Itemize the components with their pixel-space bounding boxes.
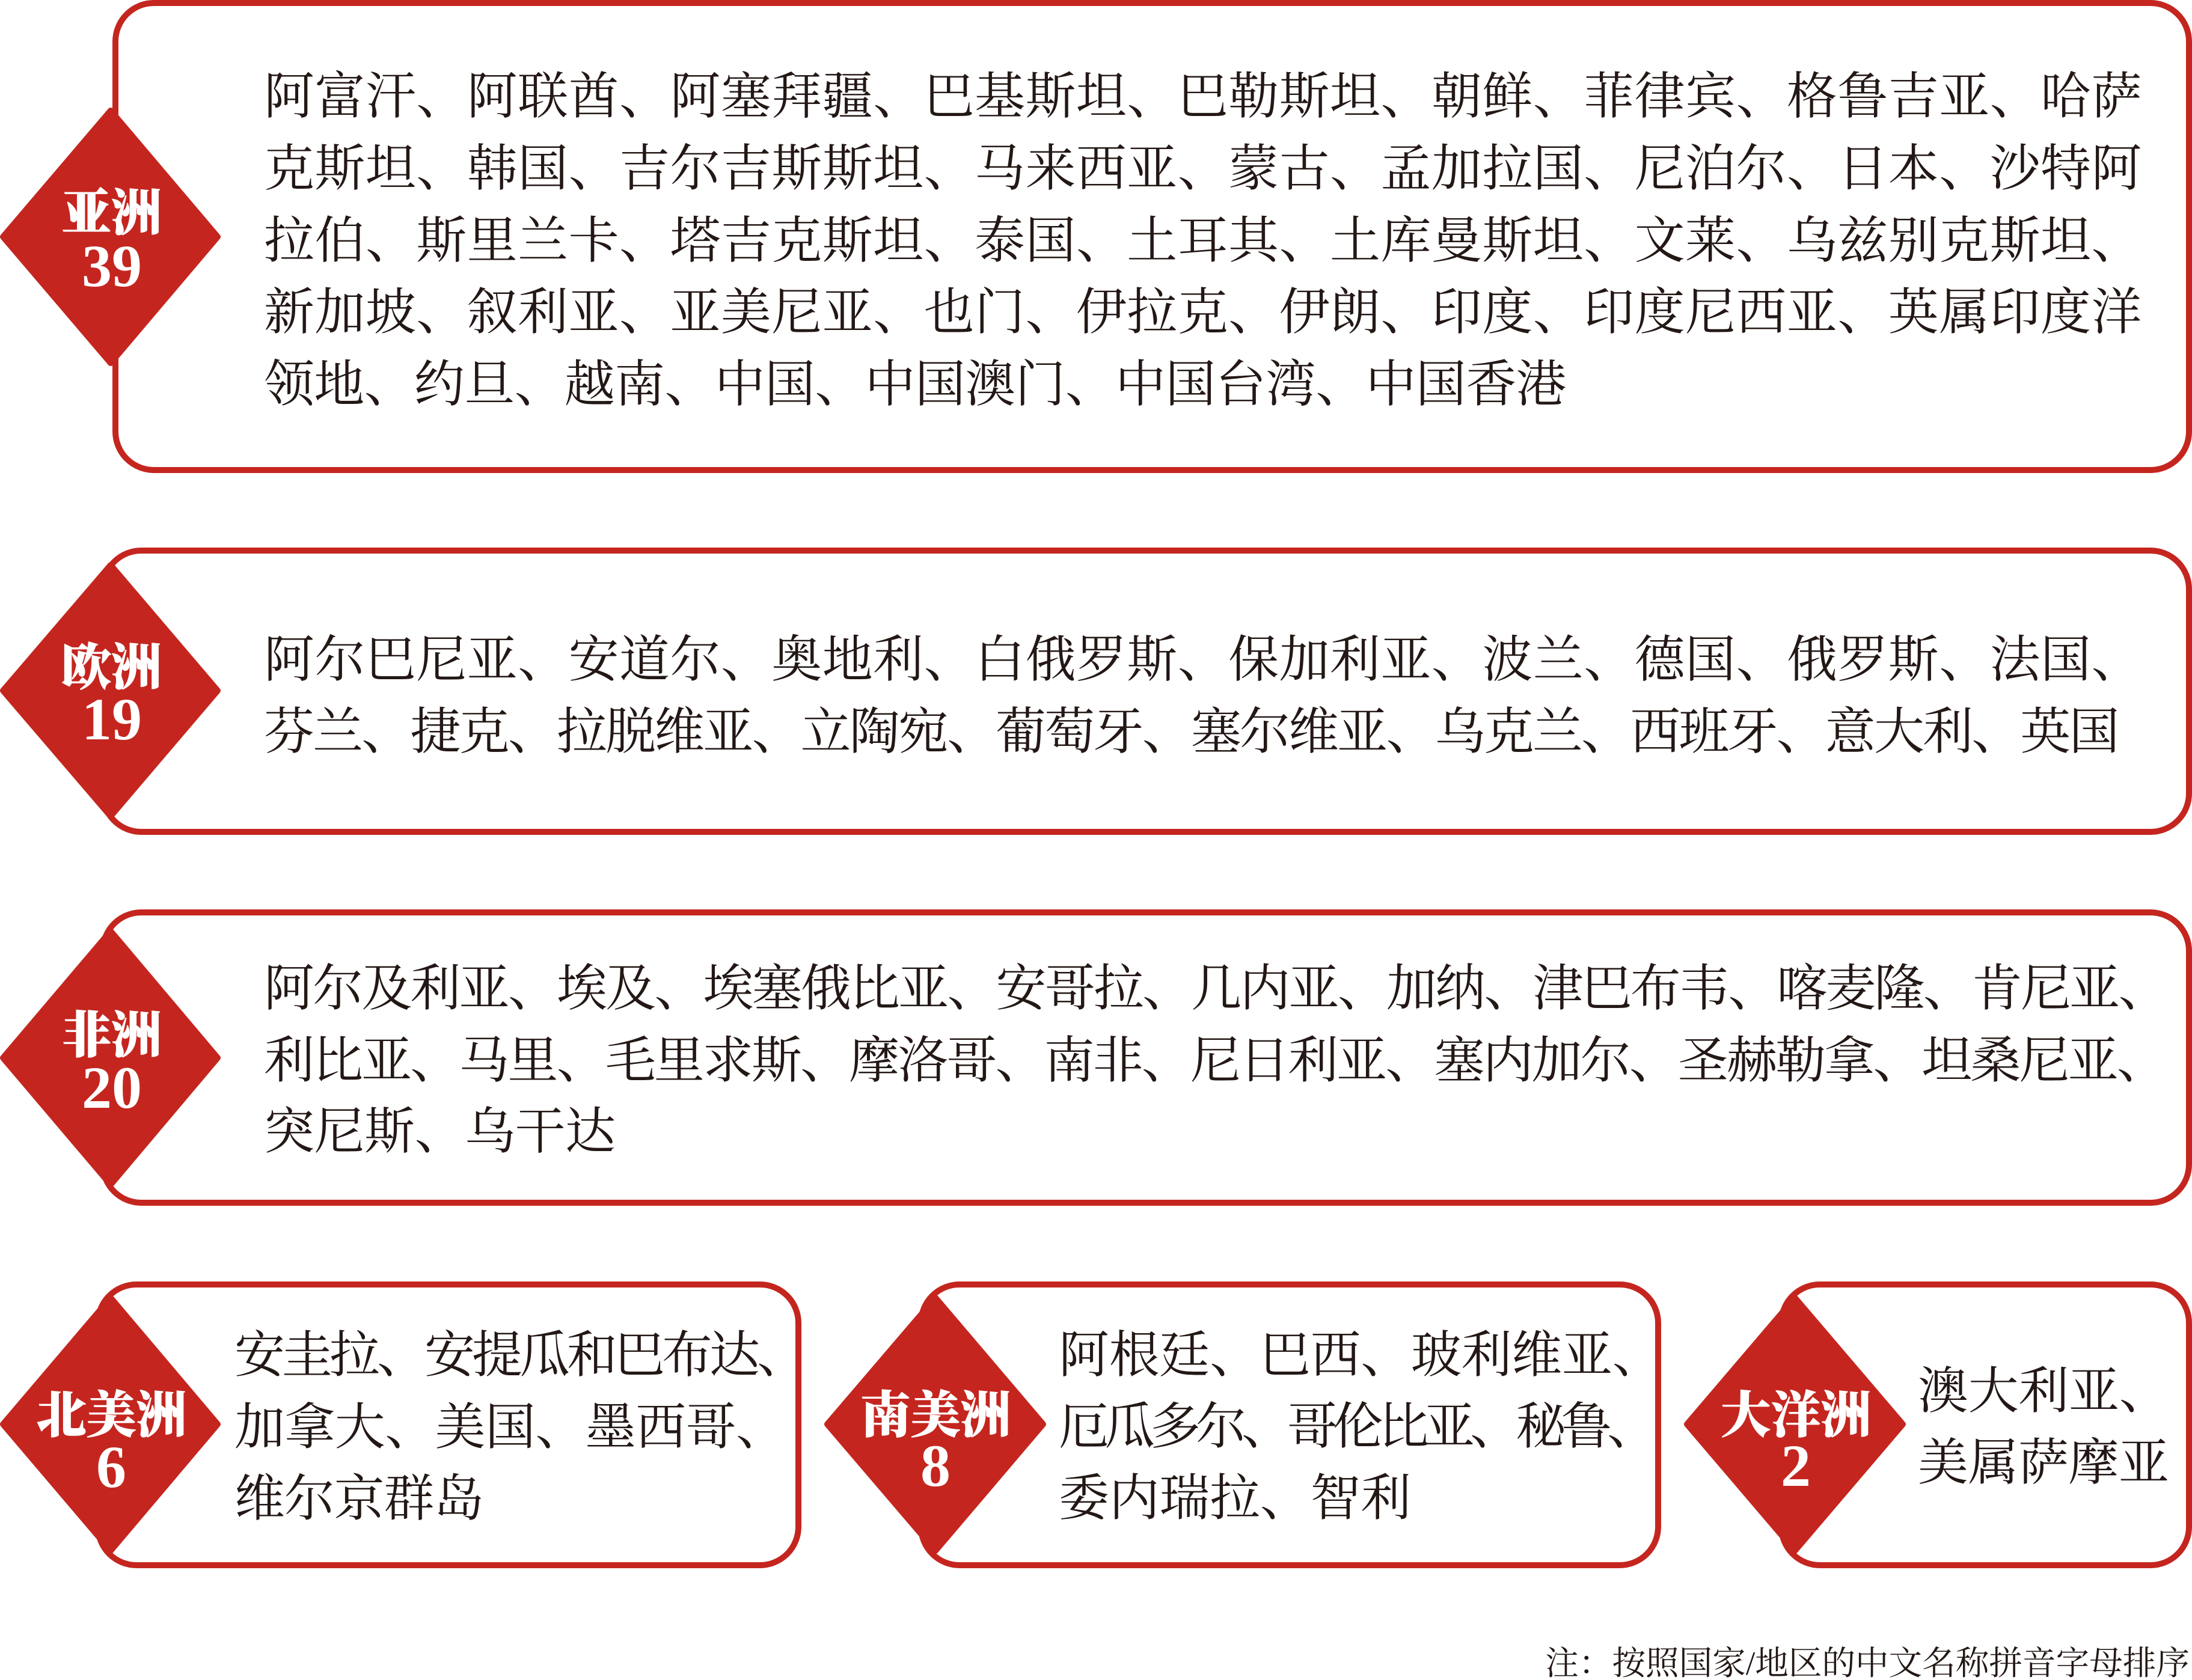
- text block: Africa countries: [264, 961, 2167, 1160]
- text block: Oceania countries: [1918, 1364, 2170, 1491]
- panel: Asia: [3, 3, 2189, 470]
- text block: Asia countries: 拉伯、斯里兰卡、塔吉克斯坦、泰国、土耳其、土库曼斯坦、文莱、乌兹别克斯坦、: [264, 213, 2142, 269]
- text block: Asia countries: 新加坡、叙利亚、亚美尼亚、也门、伊拉克、伊朗、印度、印度尼西亚、英属印度洋: [264, 285, 2142, 341]
- text block: South America countries: 厄瓜多尔、哥伦比亚、秘鲁、: [1059, 1399, 1653, 1455]
- text block: Africa countries: 阿尔及利亚、埃及、埃塞俄比亚、安哥拉、几内亚、加纳、津巴布韦、喀麦隆、肯尼亚、: [264, 961, 2167, 1017]
- text block: Asia countries: 领地、约旦、越南、中国、中国澳门、中国台湾、中国香港: [264, 357, 1566, 413]
- label: South America 8: 南美洲: [861, 1388, 1010, 1443]
- text block: North America countries: 安圭拉、安提瓜和巴布达、: [234, 1328, 804, 1384]
- label: Oceania 2: 2: [1781, 1432, 1811, 1499]
- label: North America 6: [36, 1388, 186, 1500]
- text block: South America countries: [1059, 1328, 1662, 1527]
- text block: North America countries: [234, 1328, 804, 1527]
- text block: South America countries: 委内瑞拉、智利: [1059, 1471, 1411, 1527]
- label: Africa 20: 非洲: [61, 1008, 161, 1063]
- label: Asia 39: 亚洲: [61, 186, 161, 241]
- text block: Asia countries: 克斯坦、韩国、吉尔吉斯斯坦、马来西亚、蒙古、孟加拉国、尼泊尔、日本、沙特阿: [264, 141, 2142, 197]
- text block: Oceania countries: 澳大利亚、: [1918, 1364, 2170, 1420]
- text block: Asia countries: [264, 69, 2142, 413]
- icon: Oceania diamond badge: [1687, 1298, 1903, 1551]
- label: South America 8: [861, 1388, 1010, 1499]
- text block: North America countries: 加拿大、美国、墨西哥、: [234, 1400, 786, 1456]
- panel: Oceania: [1687, 1284, 2189, 1565]
- label: Asia 39: 39: [82, 233, 142, 299]
- label: Oceania 2: 大洋洲: [1721, 1388, 1871, 1443]
- label: South America 8: 8: [920, 1432, 951, 1499]
- text block: Africa countries: 突尼斯、乌干达: [264, 1104, 616, 1160]
- label: Africa 20: [61, 1008, 161, 1121]
- icon: North America diamond badge: [3, 1298, 218, 1551]
- panel: South America: [827, 1284, 1662, 1565]
- text block: South America countries: 阿根廷、巴西、玻利维亚、: [1059, 1328, 1662, 1384]
- label: Europe 19: [61, 640, 161, 753]
- text block: Oceania countries: 美属萨摩亚: [1918, 1435, 2169, 1491]
- icon: Asia diamond badge: [3, 111, 218, 363]
- panel: Africa: [3, 912, 2189, 1203]
- icon: South America diamond badge: [827, 1298, 1043, 1551]
- label: Europe 19: 19: [82, 686, 142, 753]
- label: Africa 20: 20: [82, 1054, 142, 1121]
- text block: Europe countries: [264, 632, 2142, 760]
- text block: Europe countries: 阿尔巴尼亚、安道尔、奥地利、白俄罗斯、保加利亚、波兰、德国、俄罗斯、法国、: [264, 632, 2142, 688]
- label: North America 6: 北美洲: [36, 1388, 186, 1443]
- text block: North America countries: 维尔京群岛: [234, 1471, 483, 1527]
- panel: North America: [3, 1284, 804, 1565]
- icon: Europe diamond badge: [3, 565, 218, 816]
- label: Oceania 2: [1721, 1388, 1871, 1499]
- label: North America 6: 6: [96, 1434, 126, 1500]
- label: Asia 39: [61, 186, 161, 299]
- icon: Africa diamond badge: [3, 931, 218, 1185]
- text block: Europe countries: 芬兰、捷克、拉脱维亚、立陶宛、葡萄牙、塞尔维亚、乌克兰、西班牙、意大利、英国: [264, 704, 2118, 760]
- text block: Africa countries: 利比亚、马里、毛里求斯、摩洛哥、南非、尼日利亚、塞内加尔、圣赫勒拿、坦桑尼亚、: [264, 1033, 2166, 1089]
- text block: Asia countries: 阿富汗、阿联酋、阿塞拜疆、巴基斯坦、巴勒斯坦、朝鲜、菲律宾、格鲁吉亚、哈萨: [264, 69, 2142, 125]
- panel: Europe: [3, 551, 2189, 832]
- label: Europe 19: 欧洲: [61, 640, 161, 695]
